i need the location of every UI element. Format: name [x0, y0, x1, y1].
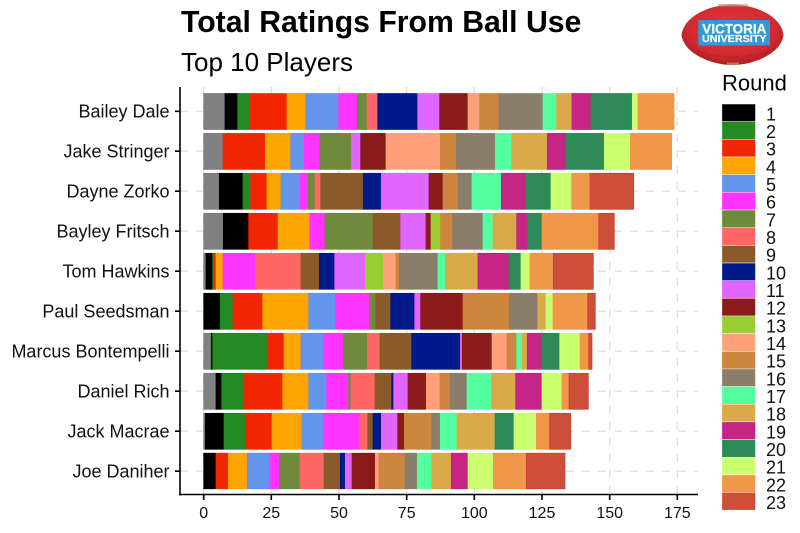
- y axis player labels: Marcus Bontempelli: [11, 342, 170, 362]
- x axis value labels: [199, 505, 691, 522]
- legend round numbers: 8: [766, 228, 776, 248]
- legend round numbers: 4: [766, 157, 776, 177]
- x axis value labels: 100: [461, 505, 488, 522]
- x axis value labels: 0: [199, 505, 208, 522]
- icon: Victoria University football logo: [682, 4, 784, 65]
- bar: Bayley Fritsch: [204, 213, 614, 249]
- legend round numbers: 12: [766, 299, 786, 319]
- icon: Victoria University football logo: VICTORIA: [702, 22, 767, 37]
- legend title: Round: [722, 70, 787, 96]
- y axis player labels: Paul Seedsman: [42, 302, 170, 322]
- legend round numbers: 16: [766, 369, 786, 389]
- y axis player labels: Jake Stringer: [63, 142, 170, 162]
- legend round numbers: 14: [766, 334, 786, 354]
- y axis with ticks: [175, 87, 180, 496]
- x axis value labels: 175: [664, 505, 691, 522]
- bar: Jake Stringer: [204, 133, 672, 169]
- y axis player labels: Bayley Fritsch: [56, 222, 170, 242]
- subtitle: Top 10 Players: [181, 47, 353, 77]
- chart gridlines: [180, 87, 698, 494]
- y axis player labels: Joe Daniher: [72, 462, 170, 482]
- legend round numbers: 23: [766, 493, 786, 513]
- legend round numbers: 17: [766, 387, 786, 407]
- y axis player labels: Bailey Dale: [78, 102, 170, 122]
- bar: Jack Macrae: [204, 413, 571, 449]
- bar: Joe Daniher: [204, 453, 565, 489]
- x axis value labels: 125: [529, 505, 555, 522]
- legend round numbers: 21: [766, 458, 786, 478]
- legend colour keys: [722, 105, 755, 509]
- legend round numbers: 10: [766, 263, 786, 283]
- x axis value labels: 25: [262, 505, 280, 522]
- bar: Dayne Zorko: [204, 173, 634, 209]
- y axis player labels: Jack Macrae: [67, 422, 170, 442]
- legend round numbers: 5: [766, 175, 776, 195]
- y axis player labels: [11, 102, 170, 481]
- icon: Victoria University football logo: UNIVERSITY: [702, 34, 767, 45]
- legend round numbers: 6: [766, 193, 776, 213]
- legend round numbers: [766, 104, 786, 513]
- y axis player labels: Dayne Zorko: [66, 182, 170, 202]
- legend round numbers: 2: [766, 122, 776, 142]
- bar: Marcus Bontempelli: [204, 333, 592, 369]
- x axis with ticks: [179, 494, 698, 500]
- legend round numbers: 7: [766, 210, 776, 230]
- x axis value labels: 75: [398, 505, 416, 522]
- legend round numbers: 3: [766, 140, 776, 160]
- legend round numbers: 22: [766, 475, 786, 495]
- bar: Tom Hawkins: [204, 253, 593, 289]
- title: Total Ratings From Ball Use: [181, 6, 581, 39]
- x axis value labels: 50: [330, 505, 348, 522]
- legend round numbers: 19: [766, 422, 786, 442]
- y axis player labels: Daniel Rich: [77, 382, 170, 402]
- legend: Round: [722, 70, 787, 513]
- legend round numbers: 1: [766, 104, 776, 124]
- bar: Bailey Dale: [204, 94, 674, 130]
- bar: Daniel Rich: [204, 373, 588, 409]
- legend round numbers: 15: [766, 352, 786, 372]
- x axis value labels: 150: [596, 505, 623, 522]
- legend round numbers: 13: [766, 316, 786, 336]
- legend round numbers: 20: [766, 440, 786, 460]
- bar: Paul Seedsman: [204, 293, 595, 329]
- legend round numbers: 9: [766, 246, 776, 266]
- legend round numbers: 11: [766, 281, 785, 301]
- y axis player labels: Tom Hawkins: [62, 262, 170, 282]
- legend round numbers: 18: [766, 405, 786, 425]
